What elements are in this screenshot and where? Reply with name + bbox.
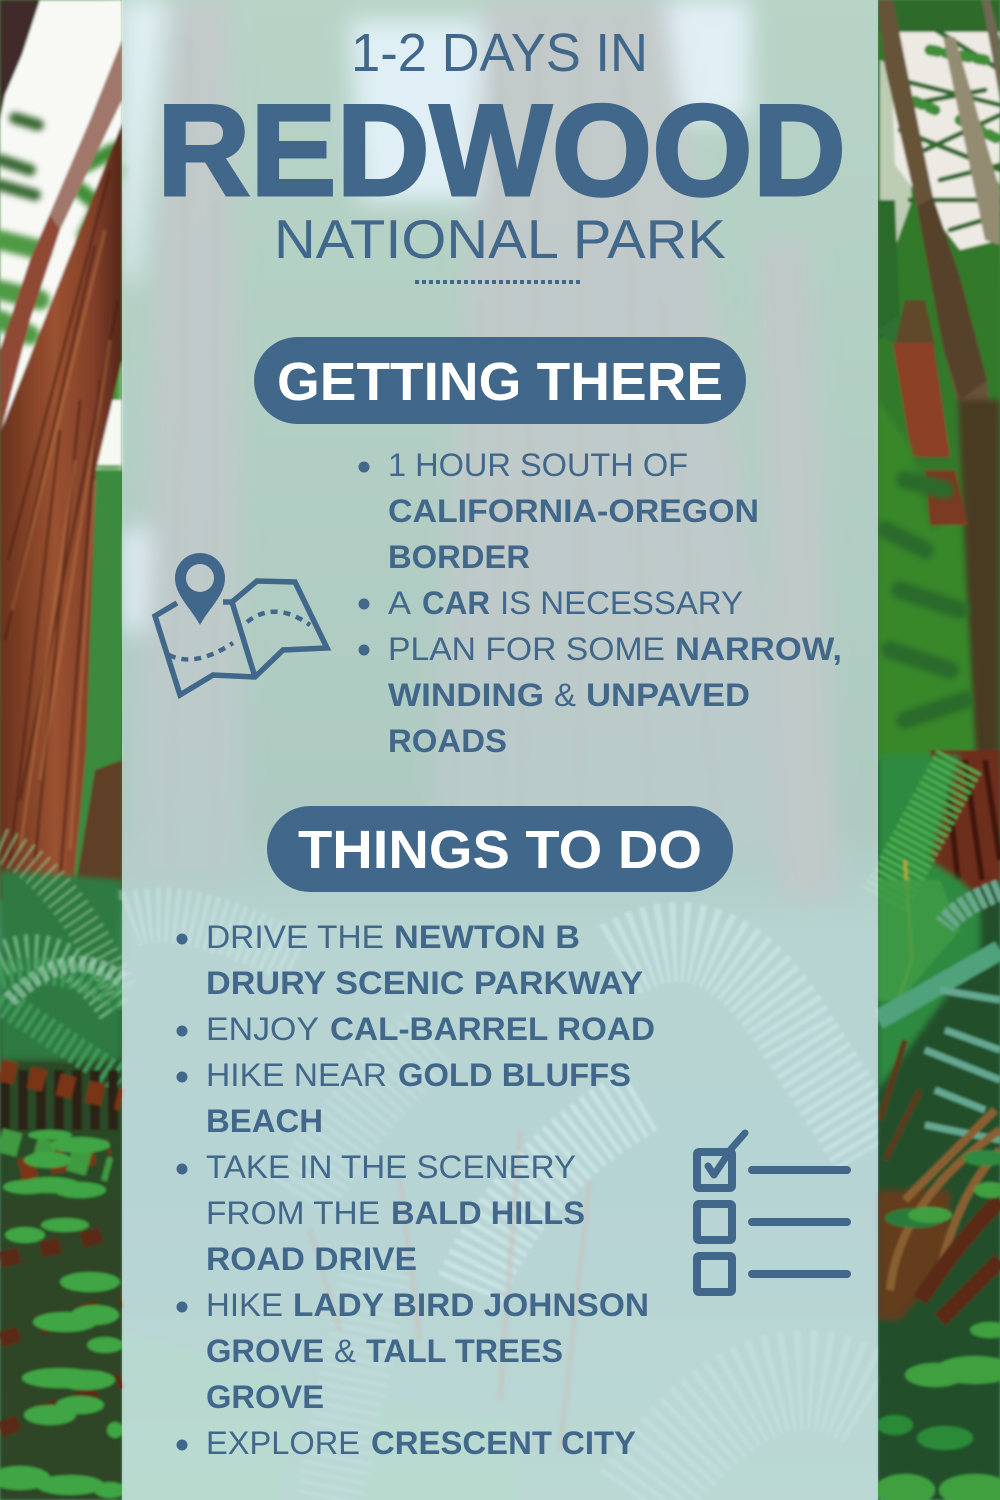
heading: things to do (267, 806, 733, 892)
item: Crescent City (206, 1425, 636, 1461)
item: Crescent City: EXPLORE (206, 1425, 360, 1461)
item: narrow roads: NARROW, (675, 631, 842, 667)
heading: getting there: GETTING THERE (277, 352, 723, 412)
icon: map with location pin (155, 553, 327, 695)
item: 1 hour south: BORDER (388, 539, 530, 575)
item: Gold Bluffs Beach: HIKE NEAR (206, 1057, 387, 1093)
item: a car (388, 585, 743, 621)
bullet markers (176, 934, 188, 1450)
heading: getting there (254, 337, 746, 424)
item: Crescent City: CRESCENT CITY (371, 1425, 636, 1461)
item: a car: CAR (422, 585, 490, 621)
title: Redwood: REDWOOD (157, 77, 846, 223)
list: getting there (358, 447, 842, 759)
item: Newton B Drury (206, 919, 643, 1001)
item: Newton B Drury: DRURY SCENIC PARKWAY (206, 965, 643, 1001)
item: Gold Bluffs Beach: GOLD BLUFFS (398, 1057, 631, 1093)
item: Lady Bird Johnson: TALL TREES (366, 1333, 563, 1369)
item: narrow roads: UNPAVED (586, 677, 750, 713)
item: Gold Bluffs Beach: BEACH (206, 1103, 323, 1139)
item: Bald Hills Road (206, 1149, 585, 1277)
title: 1-2 days in: 1-2 DAYS IN (351, 23, 648, 83)
item: Cal-Barrel Road: CAL-BARREL ROAD (330, 1011, 655, 1047)
title: National Park: NATIONAL PARK (274, 208, 726, 270)
item: Lady Bird Johnson: & (334, 1333, 356, 1369)
item: 1 hour south: 1 HOUR SOUTH OF (388, 447, 688, 483)
item: Lady Bird Johnson: GROVE (206, 1379, 324, 1415)
item: Lady Bird Johnson: GROVE (206, 1333, 324, 1369)
item: Lady Bird Johnson: LADY BIRD JOHNSON (293, 1287, 649, 1323)
item: Newton B Drury: DRIVE THE (206, 919, 384, 955)
item: Newton B Drury: NEWTON B (394, 919, 580, 955)
item: narrow roads (388, 631, 842, 759)
list: things to do (176, 919, 655, 1461)
item: Cal-Barrel Road (206, 1011, 655, 1047)
title block (157, 23, 846, 282)
item: Bald Hills Road: TAKE IN THE SCENERY (206, 1149, 576, 1185)
item: narrow roads: WINDING (388, 677, 544, 713)
dotted divider (415, 280, 580, 284)
item: Bald Hills Road: FROM THE (206, 1195, 380, 1231)
item: Bald Hills Road: ROAD DRIVE (206, 1241, 417, 1277)
right side scene (875, 0, 1000, 1500)
bullet markers (358, 462, 370, 656)
icon: checklist (697, 1133, 847, 1292)
item: narrow roads: ROADS (388, 723, 507, 759)
item: a car: A (388, 585, 412, 621)
item: Bald Hills Road: BALD HILLS (391, 1195, 585, 1231)
item: 1 hour south: CALIFORNIA-OREGON (388, 493, 759, 529)
item: Lady Bird Johnson (206, 1287, 649, 1415)
left side scene (0, 0, 126, 1500)
translucent centre panel (122, 0, 878, 1500)
heading: things to do: THINGS TO DO (298, 820, 702, 880)
item: narrow roads: & (554, 677, 576, 713)
item: Cal-Barrel Road: ENJOY (206, 1011, 319, 1047)
item: 1 hour south (388, 447, 759, 575)
item: Gold Bluffs Beach (206, 1057, 631, 1139)
item: Lady Bird Johnson: HIKE (206, 1287, 283, 1323)
item: a car: IS NECESSARY (500, 585, 743, 621)
item: narrow roads: PLAN FOR SOME (388, 631, 665, 667)
